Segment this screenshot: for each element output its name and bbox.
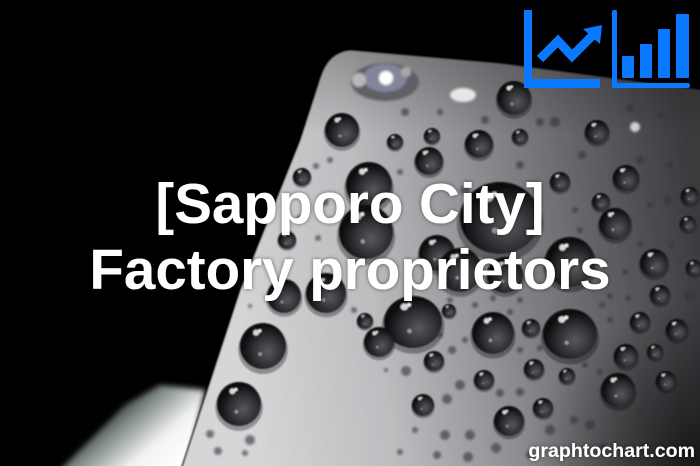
water droplets: medium	[277, 120, 700, 439]
light reflections	[450, 88, 640, 132]
title	[89, 172, 611, 301]
water droplets: large	[215, 81, 599, 431]
title: [Sapporo City]	[155, 172, 545, 235]
background: dark lower-right corner	[500, 280, 700, 466]
title: Factory proprietors	[89, 238, 611, 301]
water droplets: small	[206, 104, 696, 462]
footer: site name: graphtochart.com	[528, 440, 695, 462]
icon: bar chart	[612, 10, 690, 88]
background: dark upper band of phone	[300, 50, 700, 140]
phone camera	[351, 63, 419, 101]
icon: line chart with rising arrow	[524, 10, 602, 88]
background: white glow bottom-left	[50, 385, 205, 466]
background: phone surface	[181, 50, 700, 466]
